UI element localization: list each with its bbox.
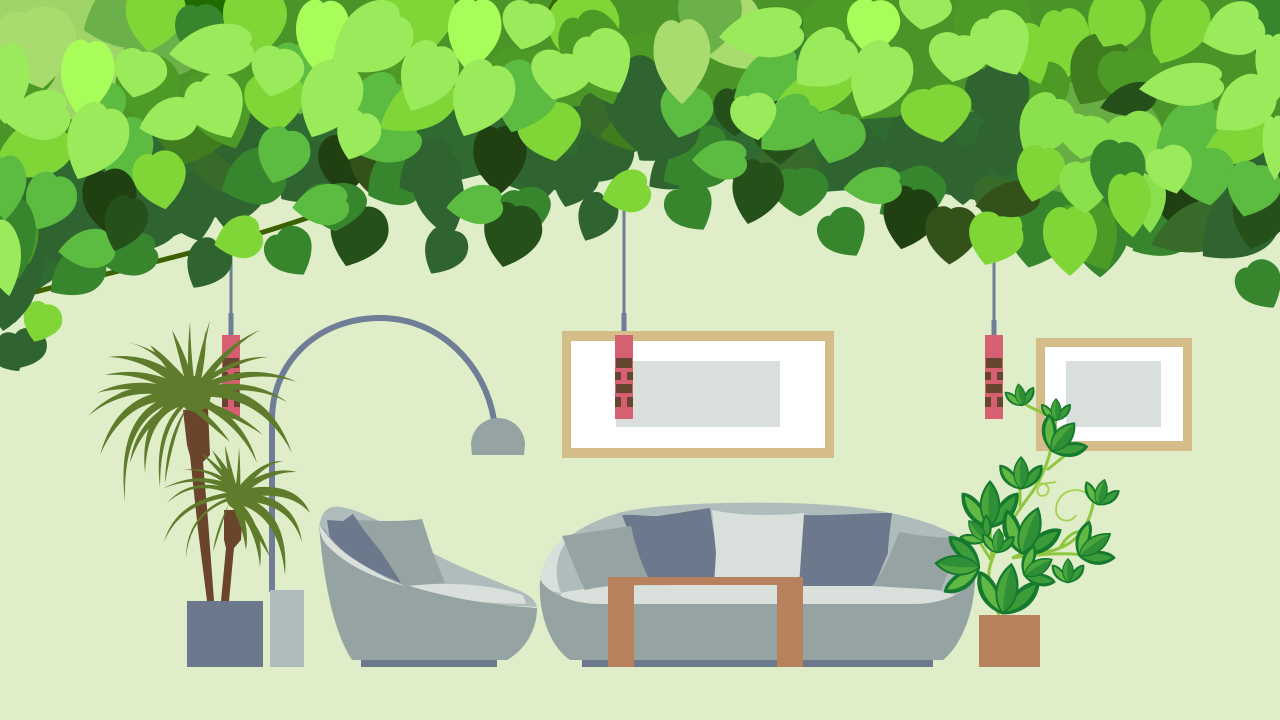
armchair [319,507,537,667]
chair base [361,660,497,667]
stems [974,397,1094,615]
plant pot [979,615,1040,667]
dark lower leaves [0,51,1280,323]
lip highlight [319,523,405,586]
canopy pale patch left [0,0,150,120]
lamp shade [471,418,525,455]
floor lamp [270,318,525,667]
leaf cluster centre [993,497,1067,564]
sofa back [540,503,975,600]
lamp base [270,590,304,667]
hanging bottom leaves [0,126,1280,380]
canopy pale patch right [1015,80,1165,210]
pillow grey [357,519,445,586]
tendril spiral [1056,490,1092,521]
body [319,523,537,660]
sofa body [540,577,975,660]
lantern centre [615,335,633,419]
lamp arc [272,318,494,592]
leaf cluster lower centre [972,557,1042,620]
picture frame large [562,331,834,458]
pillow dark [327,514,403,585]
coffee table [608,577,803,667]
mid leaves [0,2,1280,300]
canopy dark gap top [170,0,240,35]
pillow dark left [622,508,716,585]
pillow dark right [799,513,892,586]
leaf cluster upper [1031,406,1095,468]
picture frame small [1036,338,1192,451]
hanging cords and red lanterns [231,150,994,335]
canopy base mass [0,0,1280,315]
leaf cluster lower right [1013,540,1064,595]
cord centre [622,150,626,335]
sofa base [582,660,933,667]
leaf cluster large left [961,480,1019,528]
sofa seat [560,585,962,604]
bright front leaves [0,0,1280,199]
chair back [319,507,537,607]
leaf cluster small right [1052,558,1084,583]
leaf cluster mid [999,456,1043,490]
climbing plant [932,381,1124,667]
branch upper [517,0,556,70]
back leaves [0,0,1280,160]
pillow grey left [562,526,648,590]
leaf cluster top right [1041,398,1071,421]
cord right [992,250,996,335]
pillow light [712,510,804,585]
pillow grey right [872,532,962,590]
lantern left [222,335,240,419]
cord thick ends [231,313,994,335]
tendril small [1036,482,1056,496]
palm plant [88,320,310,667]
small palm fronds [162,445,310,575]
leaf cluster small middle [981,527,1015,555]
branch lower [35,217,310,292]
leaf cluster top left [1003,381,1037,409]
lantern right [985,335,1003,419]
pot [187,601,263,667]
sofa [540,503,975,667]
leaf cluster small left [955,509,999,552]
leaf cluster large lower left [932,535,983,596]
sofa lip [540,533,572,593]
trunks [183,408,214,601]
foliage canopy [0,0,1280,380]
cord left [230,200,232,335]
big palm fronds [88,320,297,502]
cushion [405,584,526,604]
leaf cluster right [1065,514,1124,575]
upper canopy shade [0,0,1280,160]
leaf cluster far right [1081,474,1122,510]
